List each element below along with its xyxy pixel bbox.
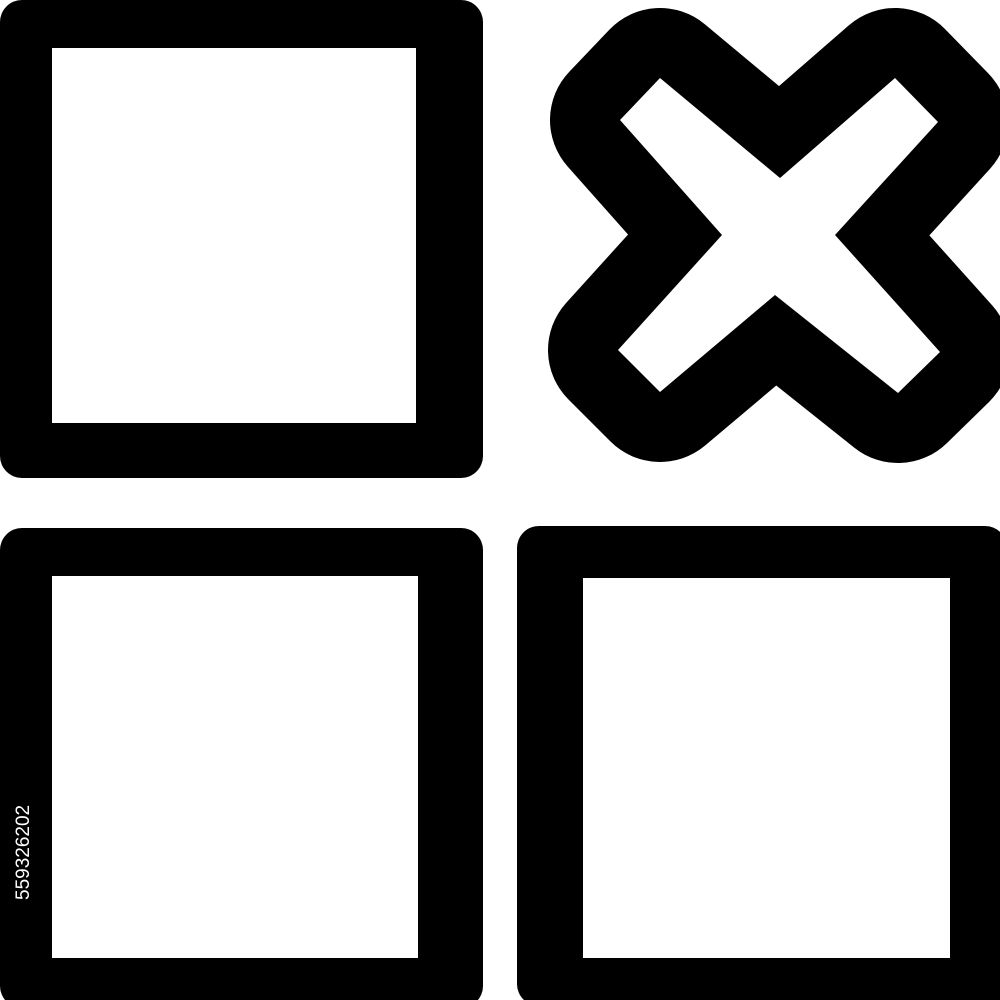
text: stock id: 559326202 (13, 805, 34, 900)
panel: bottom-right square (517, 526, 1000, 1000)
icon: X mark (618, 78, 940, 393)
panel: bottom-left square (0, 528, 483, 1000)
panel: top-left square (0, 0, 483, 478)
